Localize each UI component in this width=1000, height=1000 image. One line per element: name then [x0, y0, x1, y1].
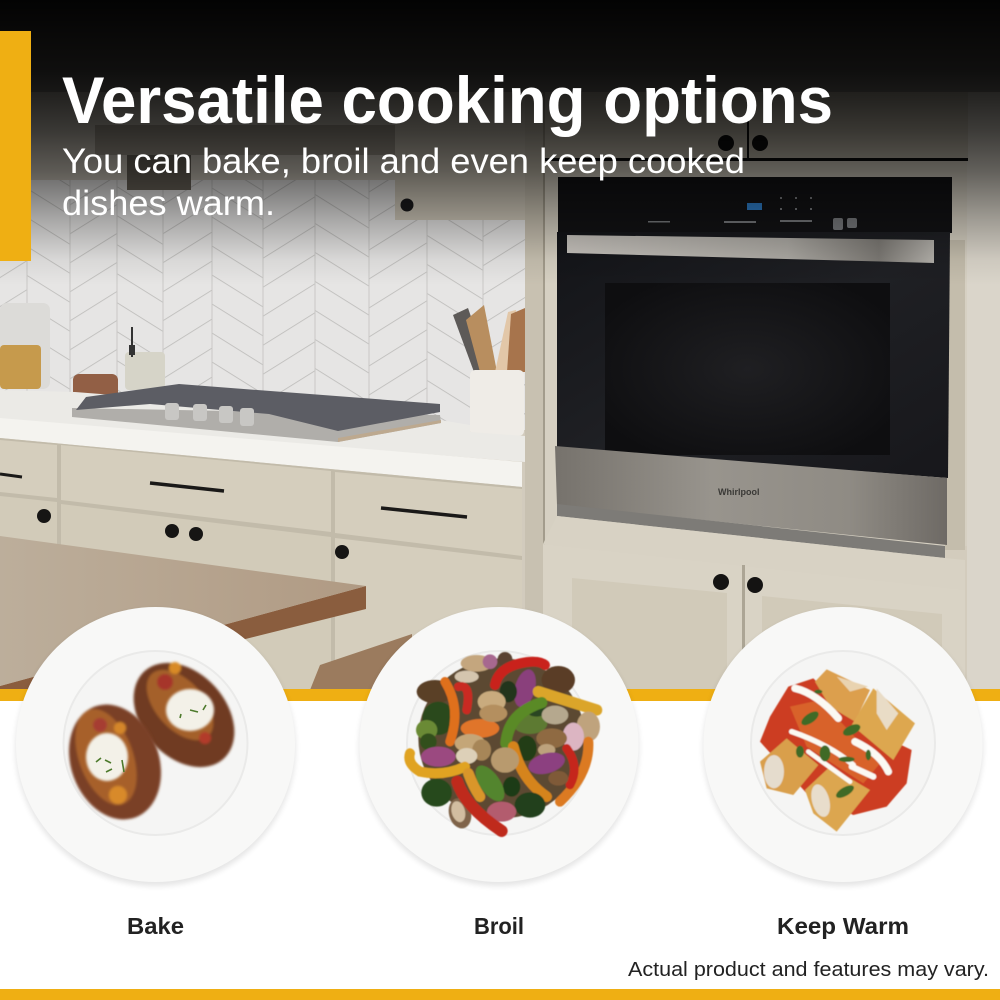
- cabinets under oven: [543, 516, 965, 700]
- kitchen photo background: [0, 0, 1000, 700]
- drawer pull 1: [150, 483, 224, 491]
- label: Keep Warm: Keep Warm: [777, 913, 909, 939]
- upper wall and hood: [0, 92, 525, 180]
- white lower panel: [0, 701, 1000, 1000]
- cabinet drawer 2: [335, 472, 522, 556]
- brand label: Whirlpool: [718, 487, 760, 497]
- subtitle: [62, 142, 745, 223]
- oven door: [557, 232, 950, 478]
- subtitle: dishes warm.: [62, 184, 275, 223]
- cooktop: [72, 384, 441, 442]
- cabinet column around oven: [525, 92, 1000, 700]
- drawer pull left: [0, 474, 22, 477]
- sour cream right: [166, 689, 214, 731]
- subtitle: You can bake, broil and even keep cooked: [62, 142, 745, 181]
- drawer pull 2: [381, 508, 467, 517]
- countertop: [0, 390, 525, 487]
- oven handle: [567, 235, 934, 263]
- cabinet drawer left: [0, 440, 57, 498]
- title: Versatile cooking options: [62, 63, 833, 137]
- upper cabinet knob: [400, 198, 414, 212]
- top shade: [0, 0, 1000, 285]
- yellow bottom bar: [0, 989, 1000, 1000]
- wall oven: [545, 161, 967, 558]
- disclaimer: Actual product and features may vary.: [628, 959, 989, 981]
- upper oven cabinet: [545, 92, 968, 161]
- under-oven knobs: [713, 574, 763, 593]
- cabinet door left: [0, 496, 57, 545]
- chair: [310, 634, 412, 690]
- tiled backsplash: [0, 170, 525, 430]
- oven lower steel panel: [555, 446, 947, 545]
- enchiladas: [760, 669, 915, 832]
- plate: bake: [16, 607, 296, 886]
- yellow side accent: [0, 31, 31, 261]
- oven display: [747, 203, 762, 210]
- knobs: [37, 509, 349, 559]
- cabinet door 1: [61, 504, 331, 700]
- label: Broil: Broil: [474, 913, 524, 939]
- oven vent: [557, 504, 945, 558]
- chives: [96, 705, 206, 772]
- cabinet door 2: [335, 538, 522, 665]
- bottle: [125, 327, 165, 390]
- table: [0, 536, 366, 700]
- plate: broil: [359, 607, 639, 886]
- upper cabinet: [395, 92, 525, 220]
- oven control panel: [558, 177, 952, 233]
- utensil crock: [453, 305, 525, 436]
- label: Bake: Bake: [127, 913, 184, 939]
- bowl: [73, 374, 118, 402]
- sour cream left: [86, 733, 128, 781]
- jar: [0, 303, 50, 389]
- vegetable medley: [409, 652, 600, 831]
- potato left: [53, 692, 177, 832]
- oven window: [605, 283, 890, 455]
- potato right: [113, 643, 255, 787]
- cabinet drawer 1: [61, 445, 331, 532]
- lower cabinets: [0, 438, 522, 700]
- yellow strip above panel: [0, 689, 1000, 701]
- plate: keep warm: [703, 607, 983, 886]
